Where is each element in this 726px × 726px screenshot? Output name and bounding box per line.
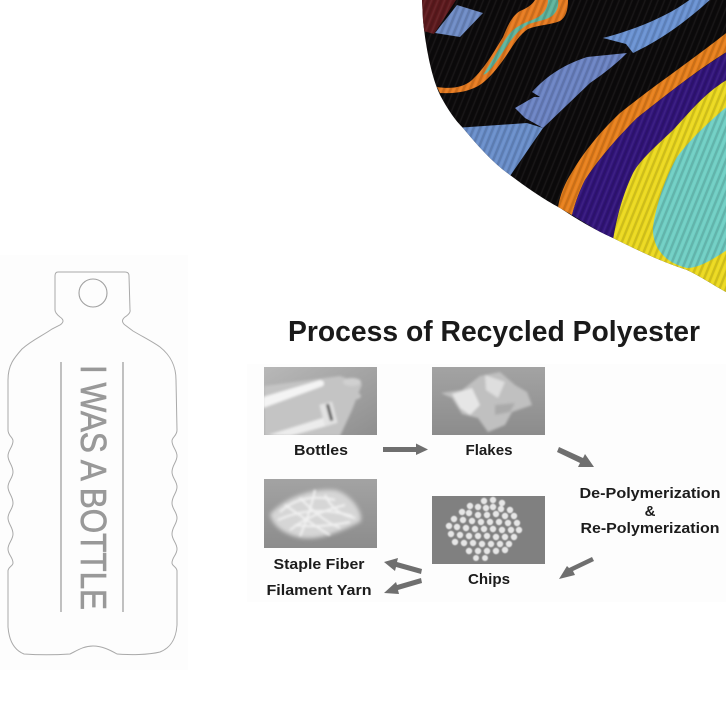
blue upper band [603, 0, 712, 53]
bottle hole [79, 279, 107, 307]
blue middle shape [515, 53, 627, 128]
pleat texture [415, 0, 726, 295]
bottle tag panel [0, 255, 188, 670]
orange band [558, 30, 726, 215]
photo: bottles [263, 367, 377, 436]
rotated text: I WAS A BOTTLE [73, 365, 114, 610]
purple band [572, 50, 726, 240]
arrow: bottles to flakes [383, 444, 428, 455]
label: Bottles: Bottles [294, 442, 348, 459]
bottle outline [8, 272, 177, 655]
yellow band [613, 78, 726, 296]
arrow: polymerization to chips [559, 557, 594, 579]
photo: staple fiber [264, 479, 377, 548]
label: Filament Yarn: Filament Yarn [266, 582, 372, 599]
photo: chips [432, 496, 545, 564]
maroon patch [420, 0, 456, 34]
process diagram panel [247, 364, 726, 602]
blue lower shape [455, 123, 543, 176]
label: Chips: Chips [468, 571, 510, 588]
left rule [60, 362, 62, 612]
teal shape [653, 104, 726, 268]
photo: flakes [432, 367, 545, 435]
right rule [122, 362, 124, 612]
title: Process of Recycled Polyester [288, 316, 700, 348]
label: Flakes: Flakes [466, 442, 512, 459]
label: polymerization [580, 485, 720, 537]
label: polymerization: De-Polymerization [580, 485, 720, 502]
small blue patch [435, 5, 483, 37]
label: polymerization: & [645, 503, 656, 520]
wavy teal stripe [483, 0, 558, 75]
arrow: flakes to polymerization [557, 447, 594, 467]
arrow: chips to filament yarn [384, 578, 422, 594]
label: polymerization: Re-Polymerization [580, 520, 720, 537]
arrow: chips to staple fiber [384, 558, 422, 574]
wavy orange stripe [437, 0, 568, 93]
label: Staple Fiber: Staple Fiber [274, 556, 365, 573]
fabric swatch image [415, 0, 726, 296]
